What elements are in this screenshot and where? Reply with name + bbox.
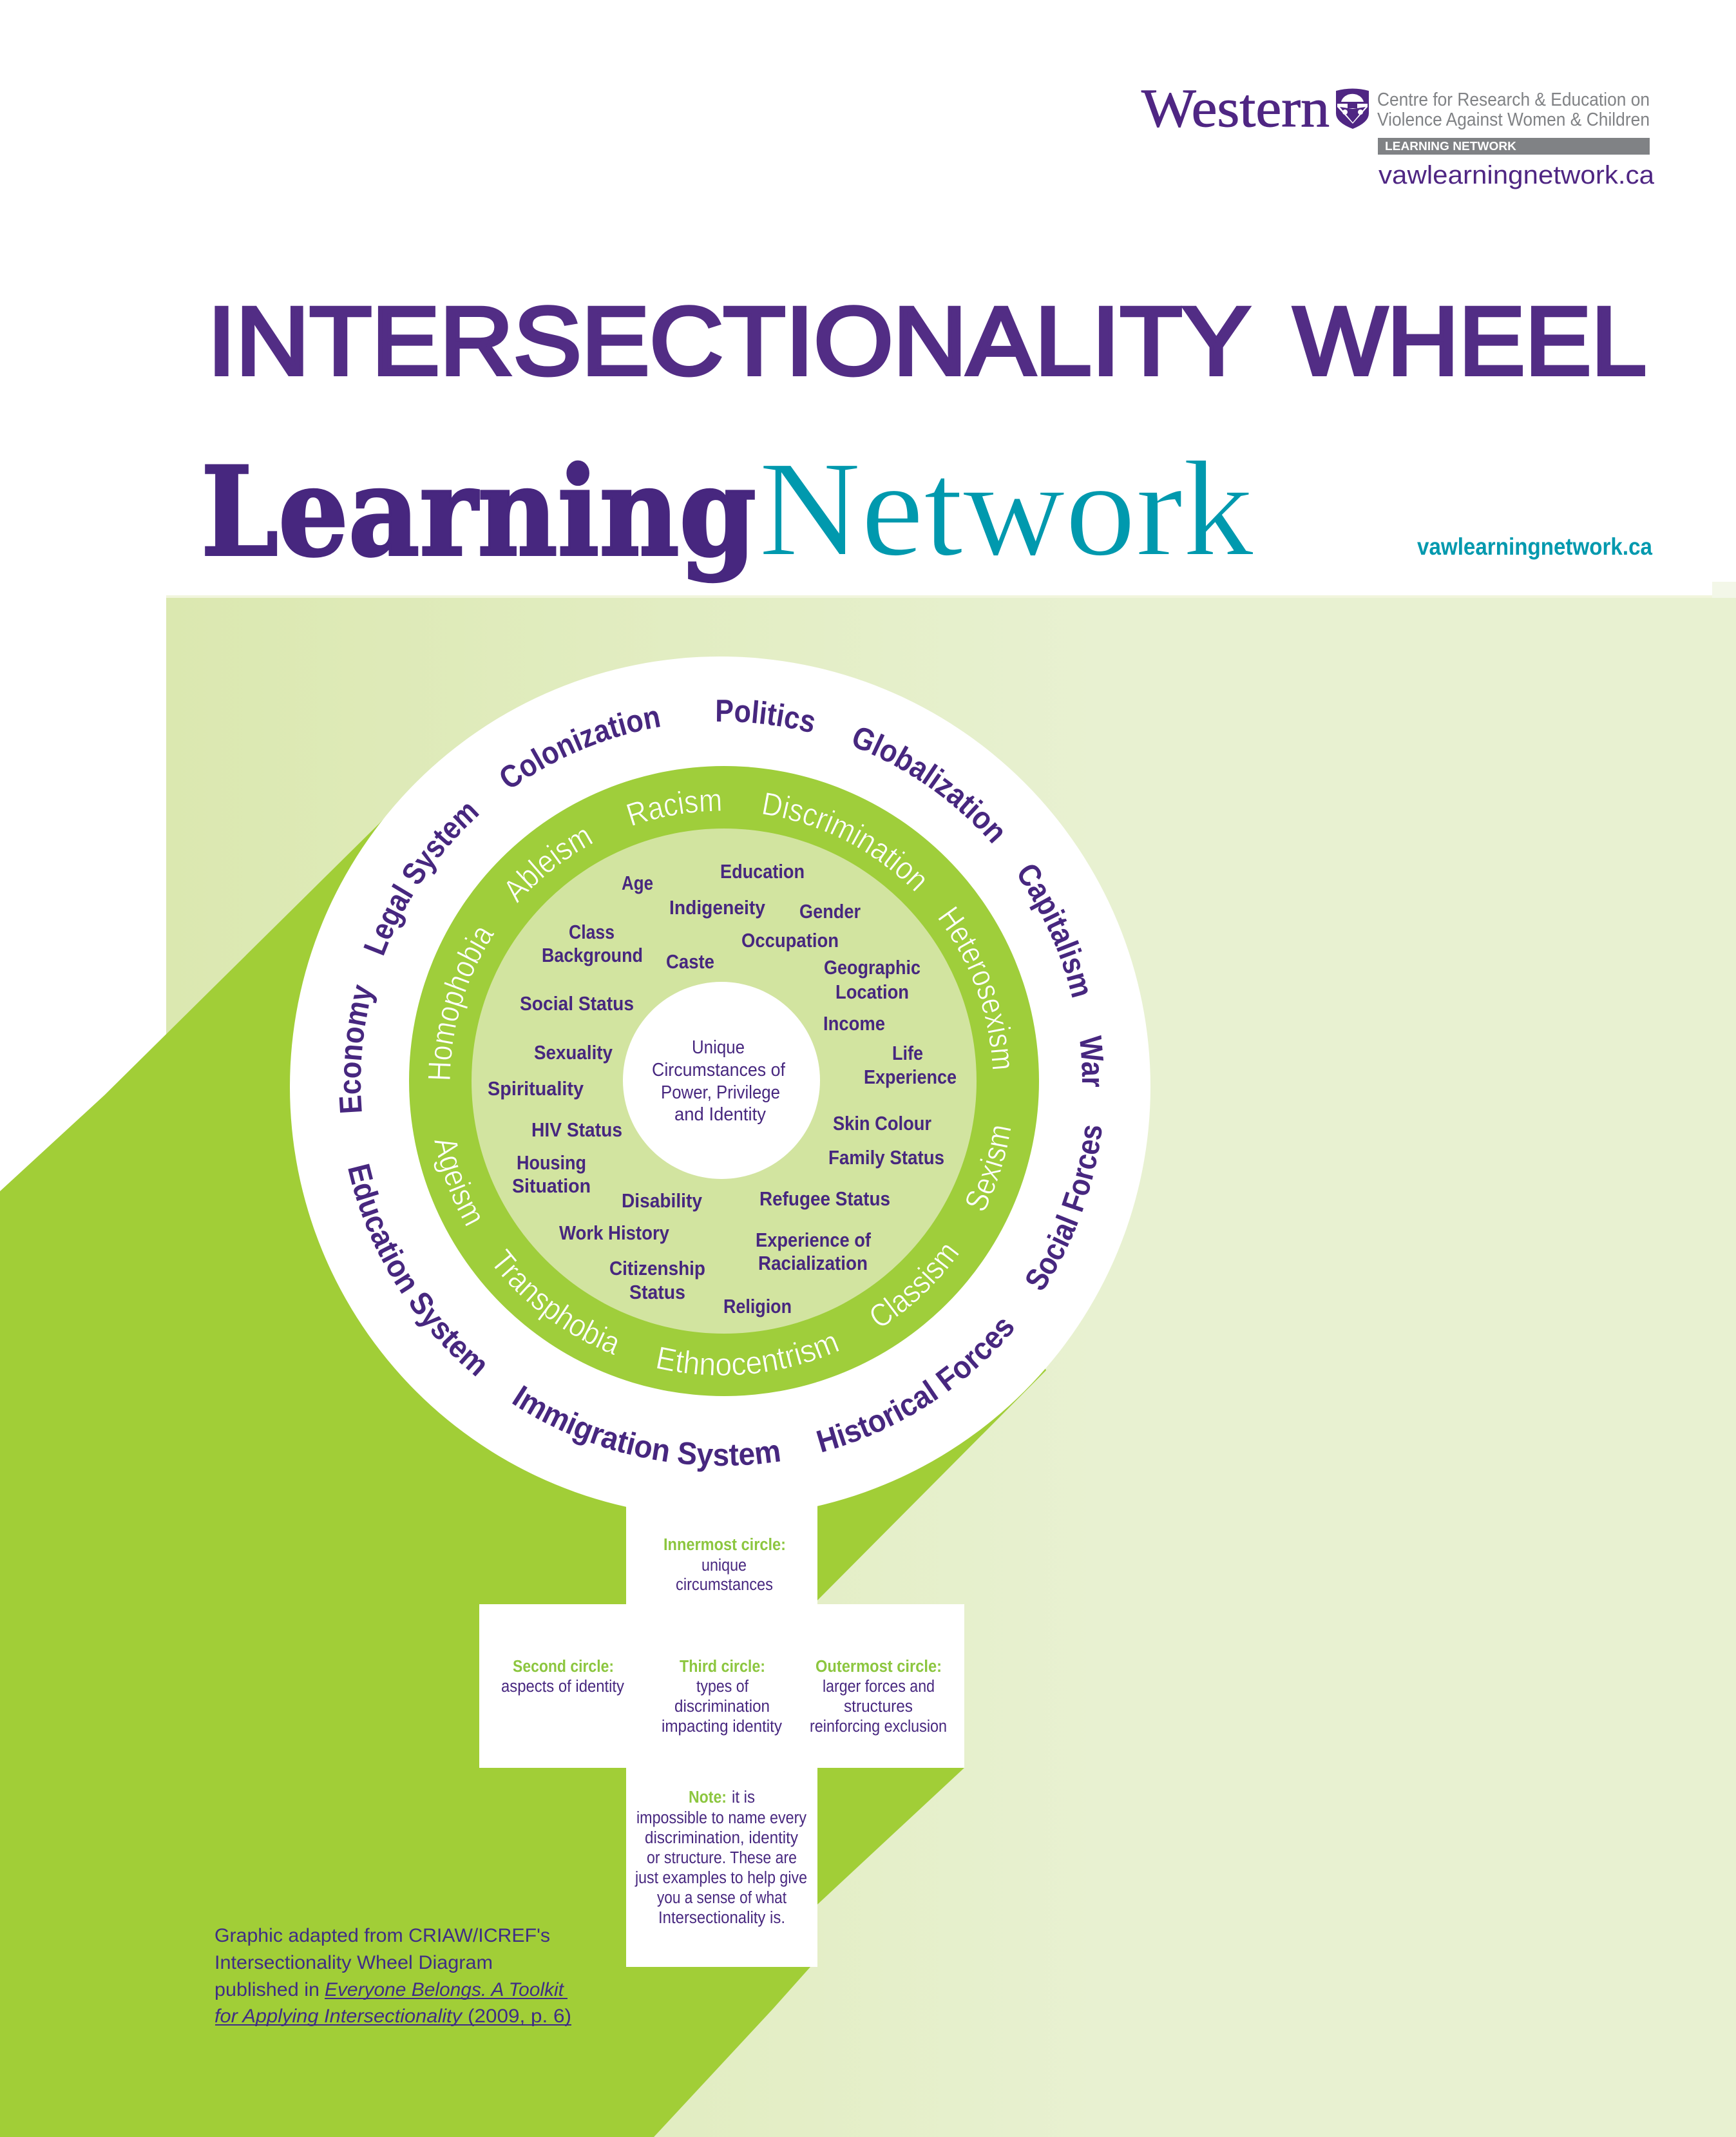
identity labels: Class bbox=[569, 921, 615, 943]
middle ring labels: types of discrimination: Discrimination bbox=[763, 792, 925, 892]
identity labels: Indigeneity bbox=[669, 896, 766, 919]
note bbox=[634, 1788, 807, 1927]
identity labels: Refugee Status bbox=[759, 1187, 890, 1210]
outer ring labels: larger forces: Education System bbox=[348, 1164, 484, 1376]
identity labels: Religion bbox=[723, 1295, 792, 1318]
note: you a sense of what bbox=[657, 1889, 787, 1907]
source credit: Graphic adapted from CRIAW/ICREF's bbox=[215, 1925, 550, 1946]
legend: second circle: aspects of identity bbox=[501, 1678, 624, 1696]
legend: third circle: discrimination bbox=[674, 1698, 770, 1716]
identity disc bbox=[472, 829, 977, 1334]
identity labels: Gender bbox=[799, 900, 861, 923]
legend: outermost circle bbox=[810, 1658, 947, 1736]
title: WHEEL bbox=[1293, 287, 1646, 395]
background panel bbox=[166, 582, 1736, 2137]
middle ring labels: types of discrimination: Sexism bbox=[966, 1126, 1011, 1211]
note: it is bbox=[732, 1788, 755, 1806]
identity labels: Age bbox=[622, 872, 653, 894]
Western logo: Western bbox=[1141, 78, 1330, 139]
middle ring labels: types of discrimination: Ableism bbox=[506, 830, 593, 903]
identity labels: Sexuality bbox=[534, 1041, 613, 1064]
note: impossible to name every bbox=[636, 1809, 806, 1827]
identity labels: Experience of bbox=[756, 1229, 872, 1251]
legend: third circle: Third circle: bbox=[680, 1658, 765, 1676]
legend: innermost circle: unique bbox=[701, 1557, 747, 1575]
legend: second circle: Second circle: bbox=[513, 1658, 614, 1676]
middle ring labels: types of discrimination: Classism bbox=[871, 1245, 959, 1326]
identity labels: Racialization bbox=[758, 1252, 868, 1274]
identity labels: Status bbox=[629, 1281, 685, 1303]
outer ring labels: larger forces bbox=[339, 700, 1104, 1471]
identity labels: Occupation bbox=[741, 929, 839, 952]
outer ring labels: larger forces: Capitalism bbox=[1019, 865, 1087, 997]
legend: outermost circle: structures bbox=[844, 1698, 913, 1716]
legend: innermost circle: Innermost circle: bbox=[663, 1536, 786, 1554]
identity labels: Social Status bbox=[520, 992, 634, 1015]
middle ring labels: types of discrimination: Ageism bbox=[434, 1140, 480, 1227]
title bbox=[207, 287, 1646, 395]
outer ring labels: larger forces: Colonization bbox=[501, 711, 660, 787]
identity labels bbox=[488, 860, 957, 1318]
identity labels: Situation bbox=[512, 1174, 591, 1197]
identity labels: Location bbox=[835, 981, 909, 1003]
identity labels: Income bbox=[823, 1012, 885, 1035]
note: just examples to help give bbox=[634, 1869, 807, 1887]
white symbol: circle and cross bbox=[290, 656, 1150, 1967]
identity labels: Life bbox=[892, 1042, 923, 1064]
note: Note: bbox=[689, 1788, 727, 1806]
outer ring labels: larger forces: Social Forces bbox=[1026, 1126, 1102, 1290]
Western logo: LEARNING NETWORK bbox=[1385, 140, 1516, 153]
centre text: Unique bbox=[692, 1037, 745, 1058]
middle ring labels: types of discrimination: Racism bbox=[626, 791, 720, 826]
Western logo bbox=[1141, 78, 1655, 189]
identity labels: HIV Status bbox=[531, 1118, 622, 1141]
outer ring labels: larger forces: Politics bbox=[717, 700, 814, 732]
source credit bbox=[215, 1925, 571, 2027]
middle ring labels: types of discrimination: Ethnocentrism bbox=[657, 1336, 839, 1376]
legend: outermost circle: larger forces and bbox=[823, 1678, 935, 1696]
centre text: Power, Privilege bbox=[661, 1082, 780, 1103]
legend: innermost circle bbox=[663, 1536, 786, 1594]
centre circle bbox=[623, 982, 820, 1179]
source credit: for Applying Intersectionality bbox=[215, 2006, 463, 2027]
source credit: Everyone Belongs. A Toolkit bbox=[325, 1979, 565, 2000]
note: discrimination, identity bbox=[645, 1829, 798, 1847]
identity labels: Family Status bbox=[828, 1146, 944, 1169]
icon: Western shield bbox=[1336, 89, 1369, 129]
middle ring labels: types of discrimination: Heterosexism bbox=[938, 906, 1011, 1069]
source credit: (2009, p. 6) bbox=[468, 2006, 571, 2027]
note: Intersectionality is. bbox=[658, 1909, 785, 1927]
identity labels: Housing bbox=[517, 1151, 586, 1174]
Western logo: Violence Against Women & Children bbox=[1377, 110, 1650, 130]
website link: vawlearningnetwork.ca bbox=[1417, 533, 1652, 560]
Learning Network wordmark: Learning bbox=[201, 440, 756, 584]
outer ring labels: larger forces: War bbox=[1080, 1035, 1104, 1087]
identity labels: Work History bbox=[559, 1222, 670, 1244]
outer ring labels: larger forces: Legal System bbox=[363, 804, 479, 956]
legend: third circle bbox=[662, 1658, 782, 1736]
legend: outermost circle: Outermost circle: bbox=[816, 1658, 942, 1676]
source credit: Intersectionality Wheel Diagram bbox=[215, 1952, 493, 1973]
middle ring labels: types of discrimination: Homophobia bbox=[428, 928, 495, 1079]
outer ring labels: larger forces: Historical Forces bbox=[816, 1319, 1014, 1452]
Learning Network wordmark: Network bbox=[759, 433, 1254, 584]
note: or structure. These are bbox=[647, 1849, 797, 1867]
title: INTERSECTIONALITY bbox=[207, 287, 1250, 395]
Learning Network wordmark bbox=[201, 433, 1254, 584]
Western logo: vawlearningnetwork.ca bbox=[1378, 161, 1655, 189]
legend: third circle: types of bbox=[696, 1678, 749, 1696]
legend: second circle bbox=[501, 1658, 624, 1696]
centre text bbox=[652, 1037, 786, 1125]
identity labels: Geographic bbox=[824, 956, 920, 979]
identity labels: Spirituality bbox=[488, 1077, 584, 1100]
centre text: and Identity bbox=[674, 1104, 766, 1125]
source credit: published in bbox=[215, 1979, 320, 2000]
middle ring labels: types of discrimination bbox=[428, 791, 1011, 1376]
outer ring labels: larger forces: Immigration System bbox=[512, 1385, 780, 1471]
legend: outermost circle: reinforcing exclusion bbox=[810, 1718, 947, 1736]
identity labels: Caste bbox=[666, 950, 714, 973]
identity labels: Citizenship bbox=[609, 1257, 705, 1279]
outer ring labels: larger forces: Globalization bbox=[854, 728, 1002, 844]
long shadow of the wheel symbol bbox=[0, 709, 1046, 2137]
Western logo: Centre for Research & Education on bbox=[1377, 90, 1650, 110]
middle ring labels: types of discrimination: Transphobia bbox=[495, 1249, 617, 1356]
identity labels: Experience bbox=[864, 1066, 957, 1088]
identity labels: Disability bbox=[622, 1189, 703, 1212]
identity labels: Education bbox=[720, 860, 805, 883]
legend: third circle: impacting identity bbox=[662, 1718, 782, 1736]
discrimination ring bbox=[409, 766, 1039, 1396]
legend: innermost circle: circumstances bbox=[676, 1576, 773, 1594]
centre text: Circumstances of bbox=[652, 1060, 786, 1080]
outer ring labels: larger forces: Economy bbox=[339, 984, 377, 1113]
identity labels: Background bbox=[542, 944, 643, 966]
identity labels: Skin Colour bbox=[833, 1112, 931, 1135]
